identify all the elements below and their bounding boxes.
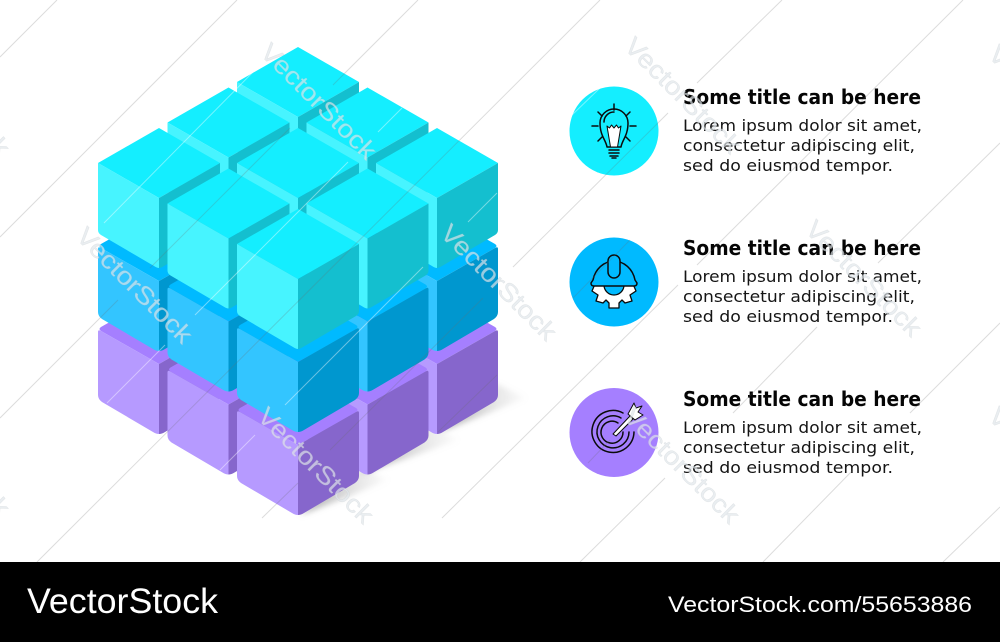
icon: target with dart <box>592 403 643 452</box>
footer bar <box>0 562 1000 642</box>
text block: Lorem ipsum dolor sit amet, <box>683 267 922 286</box>
cube <box>376 128 498 268</box>
cube <box>98 128 220 268</box>
cube <box>237 128 359 268</box>
cube <box>237 130 359 270</box>
footer url text: VectorStock.com/55653886 <box>668 592 972 617</box>
watermark text: VectorStock <box>255 38 382 166</box>
watermark text <box>0 32 1000 530</box>
circle: cyan <box>570 86 658 176</box>
middle layer: blue <box>98 130 498 432</box>
isometric cube chart <box>98 47 498 515</box>
footer logo text: VectorStock <box>27 582 219 621</box>
cube <box>306 88 428 228</box>
item 1 <box>570 85 922 176</box>
text block: sed do eiusmod tempor. <box>683 458 893 477</box>
text block: consectetur adipiscing elit, <box>683 136 915 155</box>
icon: helmet and gear <box>591 255 637 308</box>
cube <box>237 209 359 349</box>
cube <box>168 254 290 394</box>
cube <box>168 170 290 310</box>
cube <box>376 294 498 434</box>
top layer: cyan <box>98 47 498 349</box>
cube <box>306 252 428 392</box>
cube <box>168 88 290 228</box>
watermark text: VectorStock <box>618 402 745 530</box>
watermark text: VectorStock <box>800 215 927 343</box>
cube <box>237 213 359 353</box>
watermark text: VectorStock <box>435 219 562 347</box>
bottom layer: purple <box>98 213 498 515</box>
icon: light bulb <box>592 104 636 158</box>
cube <box>237 294 359 434</box>
cube <box>237 292 359 432</box>
cube <box>168 334 290 474</box>
text block: consectetur adipiscing elit, <box>683 438 915 457</box>
cube <box>237 47 359 187</box>
cube <box>98 294 220 434</box>
cube <box>376 211 498 351</box>
cube <box>237 211 359 351</box>
cube <box>306 254 428 394</box>
cube <box>168 252 290 392</box>
cube <box>306 334 428 474</box>
heading: Some title can be here <box>683 236 921 260</box>
text block <box>683 116 922 175</box>
item 3 <box>570 387 922 477</box>
text block: consectetur adipiscing elit, <box>683 287 915 306</box>
text block <box>683 267 922 326</box>
text block: sed do eiusmod tempor. <box>683 307 893 326</box>
cube <box>168 168 290 308</box>
watermark text: VectorStock <box>252 402 379 530</box>
text block: Lorem ipsum dolor sit amet, <box>683 116 922 135</box>
cube <box>98 211 220 351</box>
cube <box>306 170 428 310</box>
cube <box>306 168 428 308</box>
text block: sed do eiusmod tempor. <box>683 156 893 175</box>
watermark text: VectorStock <box>619 32 746 160</box>
heading: Some title can be here <box>683 387 921 411</box>
watermark text: VectorStock <box>71 222 198 350</box>
heading: Some title can be here <box>683 85 921 109</box>
cube shadows <box>300 384 526 515</box>
text block <box>683 418 922 477</box>
item 2 <box>570 236 922 326</box>
circle: blue <box>570 238 658 326</box>
text block: Lorem ipsum dolor sit amet, <box>683 418 922 437</box>
cube <box>237 375 359 515</box>
circle: purple <box>570 388 658 477</box>
